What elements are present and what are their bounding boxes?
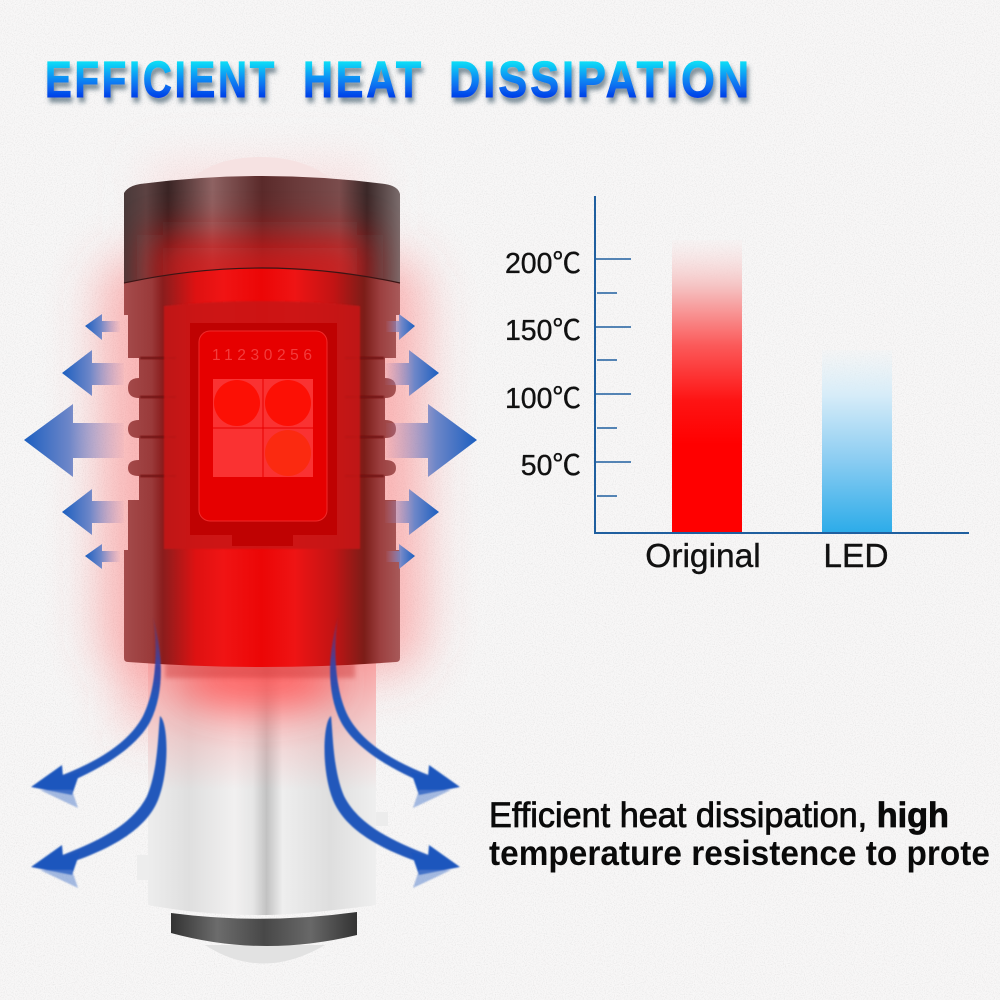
arrow large left bbox=[24, 404, 124, 477]
arrow small lower left bbox=[85, 544, 120, 569]
side arrows left bbox=[24, 314, 124, 569]
arrow medium upper right bbox=[385, 350, 439, 396]
LED circuit board bbox=[199, 331, 327, 521]
caption: temperature resistence to prote bbox=[489, 834, 990, 873]
axis labels: 100℃ bbox=[505, 383, 581, 415]
bulb end cap bbox=[171, 912, 357, 964]
arrow small upper right bbox=[386, 314, 415, 340]
bulb base bbox=[137, 652, 388, 915]
curved airflow arrows left bbox=[31, 617, 166, 888]
caption: Efficient heat dissipation, high bbox=[489, 796, 949, 835]
curved arrow lower left bbox=[31, 716, 166, 888]
axis labels: 50℃ bbox=[521, 450, 581, 482]
bulb head collar bbox=[124, 176, 400, 284]
board serial number: 11230256 bbox=[212, 347, 312, 364]
curved airflow arrows right bbox=[324, 617, 460, 888]
side arrows right bbox=[385, 314, 477, 569]
bulb lens dome bbox=[190, 157, 332, 180]
arrow medium lower right bbox=[385, 489, 439, 535]
curved arrow upper left bbox=[31, 617, 161, 808]
bulb red body bbox=[124, 268, 400, 667]
LED recess panel bbox=[164, 301, 360, 549]
title bbox=[45, 51, 752, 108]
red heat glow bbox=[100, 165, 424, 730]
arrow small lower right bbox=[386, 544, 415, 569]
LED chip grid bbox=[213, 379, 313, 477]
axis labels bbox=[505, 248, 581, 482]
label: LED: LED bbox=[823, 538, 889, 575]
axis labels: 150℃ bbox=[505, 315, 581, 347]
arrow small upper left bbox=[85, 314, 120, 340]
curved arrow upper right bbox=[330, 617, 460, 808]
temperature bar chart bbox=[505, 196, 969, 575]
curved arrow lower right bbox=[324, 716, 460, 888]
bar: original bbox=[672, 240, 742, 532]
chart axes and ticks bbox=[595, 196, 969, 533]
caption bbox=[489, 796, 990, 873]
title: HEAT bbox=[303, 51, 424, 108]
arrow large right bbox=[386, 404, 477, 477]
bar: LED bbox=[822, 350, 892, 532]
arrow medium upper left bbox=[62, 350, 124, 396]
title: DISSIPATION bbox=[449, 51, 752, 108]
bulb bbox=[124, 157, 400, 964]
label: original: Original bbox=[645, 538, 761, 575]
title: EFFICIENT bbox=[45, 51, 277, 108]
axis labels: 200℃ bbox=[505, 248, 581, 280]
cooling fin grooves bbox=[140, 358, 384, 476]
arrow medium lower left bbox=[62, 489, 124, 535]
